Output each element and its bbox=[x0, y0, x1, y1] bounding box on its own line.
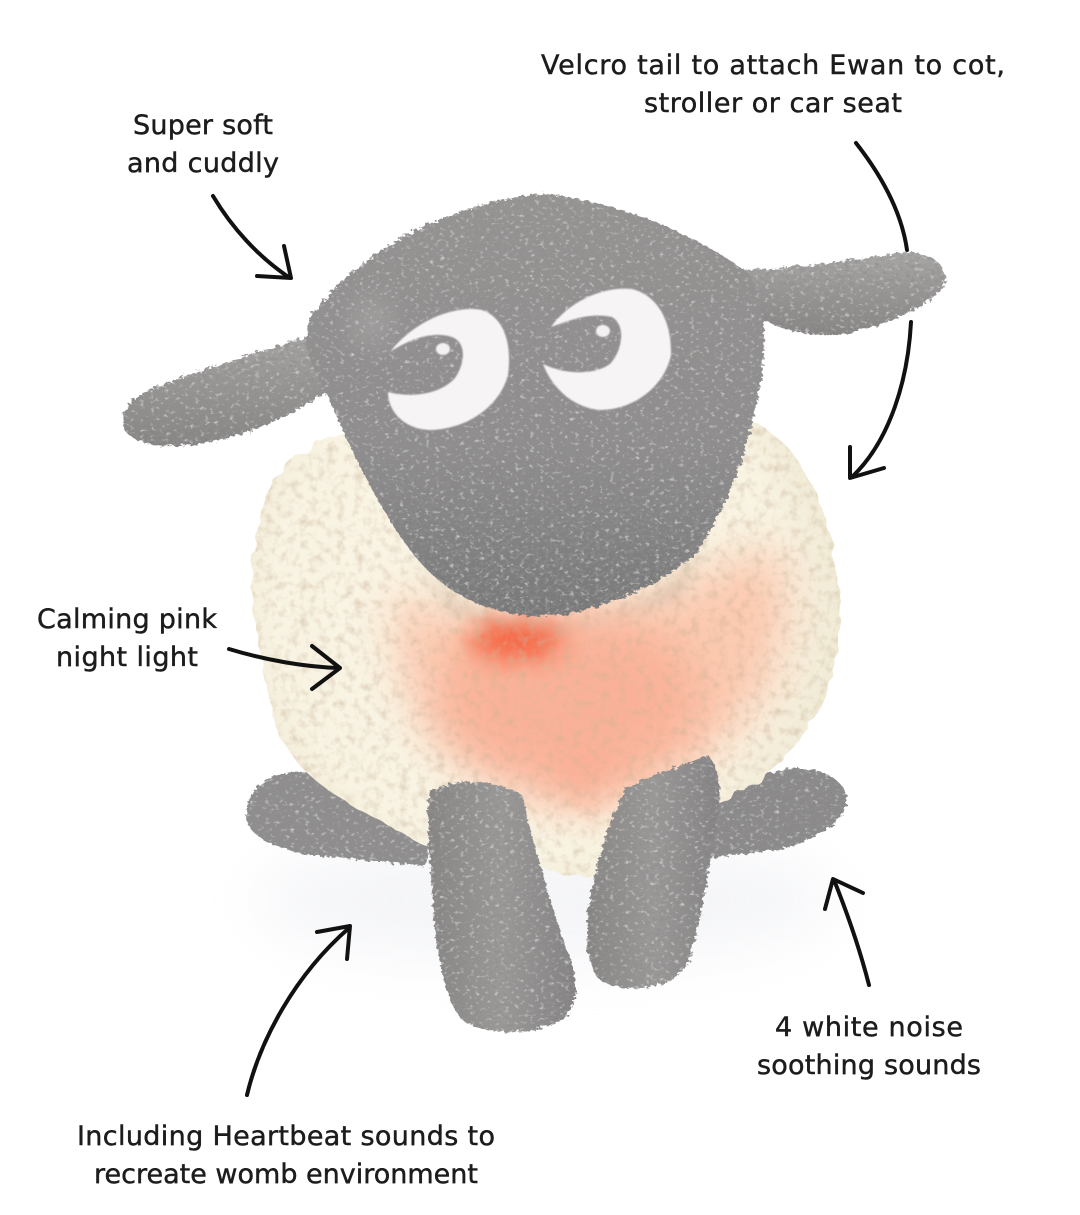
label: calming pink night light bbox=[37, 604, 217, 673]
label: velcro tail bbox=[541, 50, 1005, 119]
arrow: super soft bbox=[213, 196, 291, 278]
arrow: white noise bbox=[825, 879, 869, 985]
label: super soft: Super soft bbox=[133, 110, 273, 141]
label: heartbeat sounds bbox=[77, 1121, 495, 1190]
label: white noise sounds bbox=[757, 1012, 981, 1081]
arrow: heartbeat bbox=[247, 926, 350, 1095]
back right foot bbox=[700, 768, 847, 858]
head shadow on wool bbox=[400, 540, 710, 632]
label: velcro tail: Velcro tail to attach Ewan to cot, bbox=[541, 50, 1005, 81]
label: white noise sounds: 4 white noise bbox=[775, 1012, 963, 1043]
left eye bbox=[388, 309, 509, 430]
floor shadow bbox=[255, 835, 835, 965]
left front leg bbox=[428, 782, 576, 1032]
label: heartbeat sounds: recreate womb environment bbox=[94, 1159, 478, 1190]
label: velcro tail: stroller or car seat bbox=[644, 88, 902, 119]
label: super soft: and cuddly bbox=[127, 148, 279, 179]
back left foot bbox=[246, 772, 440, 866]
head highlight bbox=[352, 296, 392, 348]
right front leg bbox=[587, 755, 720, 988]
label: white noise sounds: soothing sounds bbox=[757, 1050, 981, 1081]
sheep plush toy bbox=[123, 194, 945, 1032]
left ear bbox=[123, 325, 350, 446]
right eye bbox=[543, 289, 671, 410]
arrow: velcro tail bbox=[850, 143, 911, 478]
pink night light glow bbox=[395, 545, 787, 812]
label: calming pink night light: Calming pink bbox=[37, 604, 217, 635]
woolly body with pink glow bbox=[252, 392, 839, 876]
label: calming pink night light: night light bbox=[56, 642, 198, 673]
label: heartbeat sounds: Including Heartbeat sounds to bbox=[77, 1121, 495, 1152]
label: super soft bbox=[127, 110, 279, 179]
arrow: night light bbox=[229, 646, 340, 689]
right ear bbox=[720, 252, 945, 335]
head bbox=[306, 194, 764, 616]
